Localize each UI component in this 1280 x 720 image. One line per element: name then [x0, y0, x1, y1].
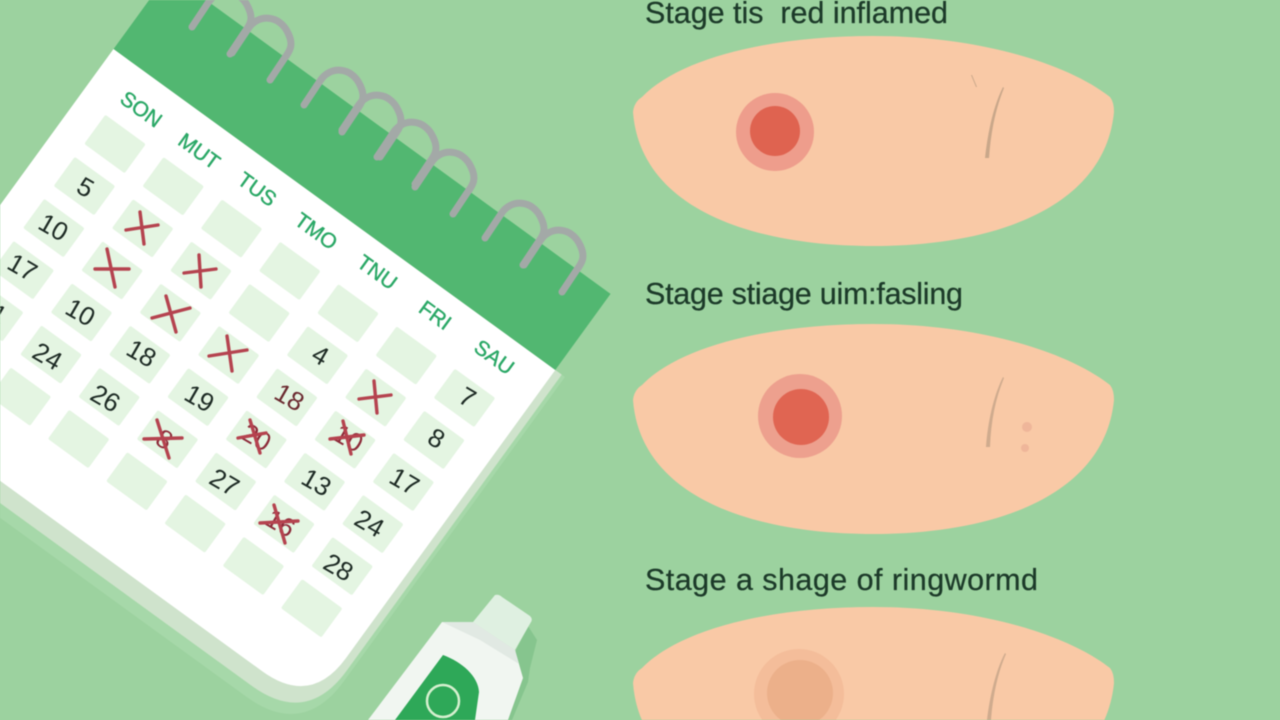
stage 3 skin patch	[633, 607, 1114, 720]
stage 2	[633, 277, 1114, 534]
weekday labels: TUS	[233, 168, 281, 211]
day numbers: 18	[121, 333, 162, 373]
day numbers: 19	[179, 378, 220, 418]
stage 1 red lesion	[736, 93, 814, 171]
stage 1 skin patch	[633, 36, 1114, 246]
spiral binding rings	[192, 0, 583, 292]
weekday labels: SAU	[470, 336, 518, 380]
day numbers: 17	[384, 461, 425, 501]
day numbers: 24	[349, 503, 390, 543]
day numbers: 18	[269, 377, 310, 417]
calendar cell grid	[0, 115, 495, 638]
day numbers: 26	[85, 378, 126, 418]
weekday labels: TNU	[353, 251, 401, 295]
day numbers: 10	[60, 292, 101, 332]
stage 2 red lesion	[758, 374, 842, 458]
stage 2 skin patch	[633, 324, 1114, 534]
crossed-off days: 16	[260, 503, 301, 543]
day numbers: 24	[27, 336, 68, 376]
stage 1 hair	[971, 75, 1004, 158]
tube label	[395, 655, 479, 720]
calendar page	[0, 49, 555, 706]
calendar header band	[114, 0, 611, 370]
tube label ring	[427, 685, 459, 717]
ointment tube	[368, 595, 537, 720]
stage 3 hair	[987, 653, 1006, 720]
weekday labels: TMO	[290, 209, 341, 255]
weekday labels: SON	[116, 87, 166, 132]
day numbers: 8	[423, 422, 450, 455]
tube shadow	[500, 626, 537, 720]
stage 3	[633, 563, 1114, 720]
crossed-off days	[95, 212, 391, 543]
weekday labels: MUT	[174, 129, 224, 175]
calendar soft ground shadow	[0, 49, 565, 720]
stage 2 hair and flakes	[986, 377, 1032, 452]
crossed-off days: 8	[151, 423, 178, 456]
tube body	[368, 622, 523, 720]
day numbers: 10	[33, 207, 74, 247]
day numbers: 28	[318, 547, 359, 587]
calendar page edge	[0, 49, 562, 720]
tube cap	[473, 595, 532, 650]
tube shoulder	[442, 622, 519, 664]
crossed-off days: 20	[236, 417, 277, 457]
day numbers: 13	[296, 462, 337, 502]
calendar	[0, 0, 611, 720]
stage 3 heading: Stage a shage of ringwormd	[645, 563, 1038, 597]
stage 3 fading lesion	[754, 649, 844, 720]
day numbers: 5	[72, 171, 99, 204]
weekday labels: FRI	[414, 296, 455, 335]
stage 1	[633, 0, 1114, 246]
day numbers: 7	[454, 381, 481, 414]
day numbers: 4	[307, 339, 334, 372]
day numbers: 17	[2, 247, 43, 287]
crossed-off days: 10	[328, 418, 369, 458]
stage 2 heading: Stage stiage uim:fasling	[645, 277, 963, 311]
day numbers: 27	[204, 462, 245, 502]
weekday labels	[116, 87, 518, 380]
day numbers	[0, 171, 481, 587]
